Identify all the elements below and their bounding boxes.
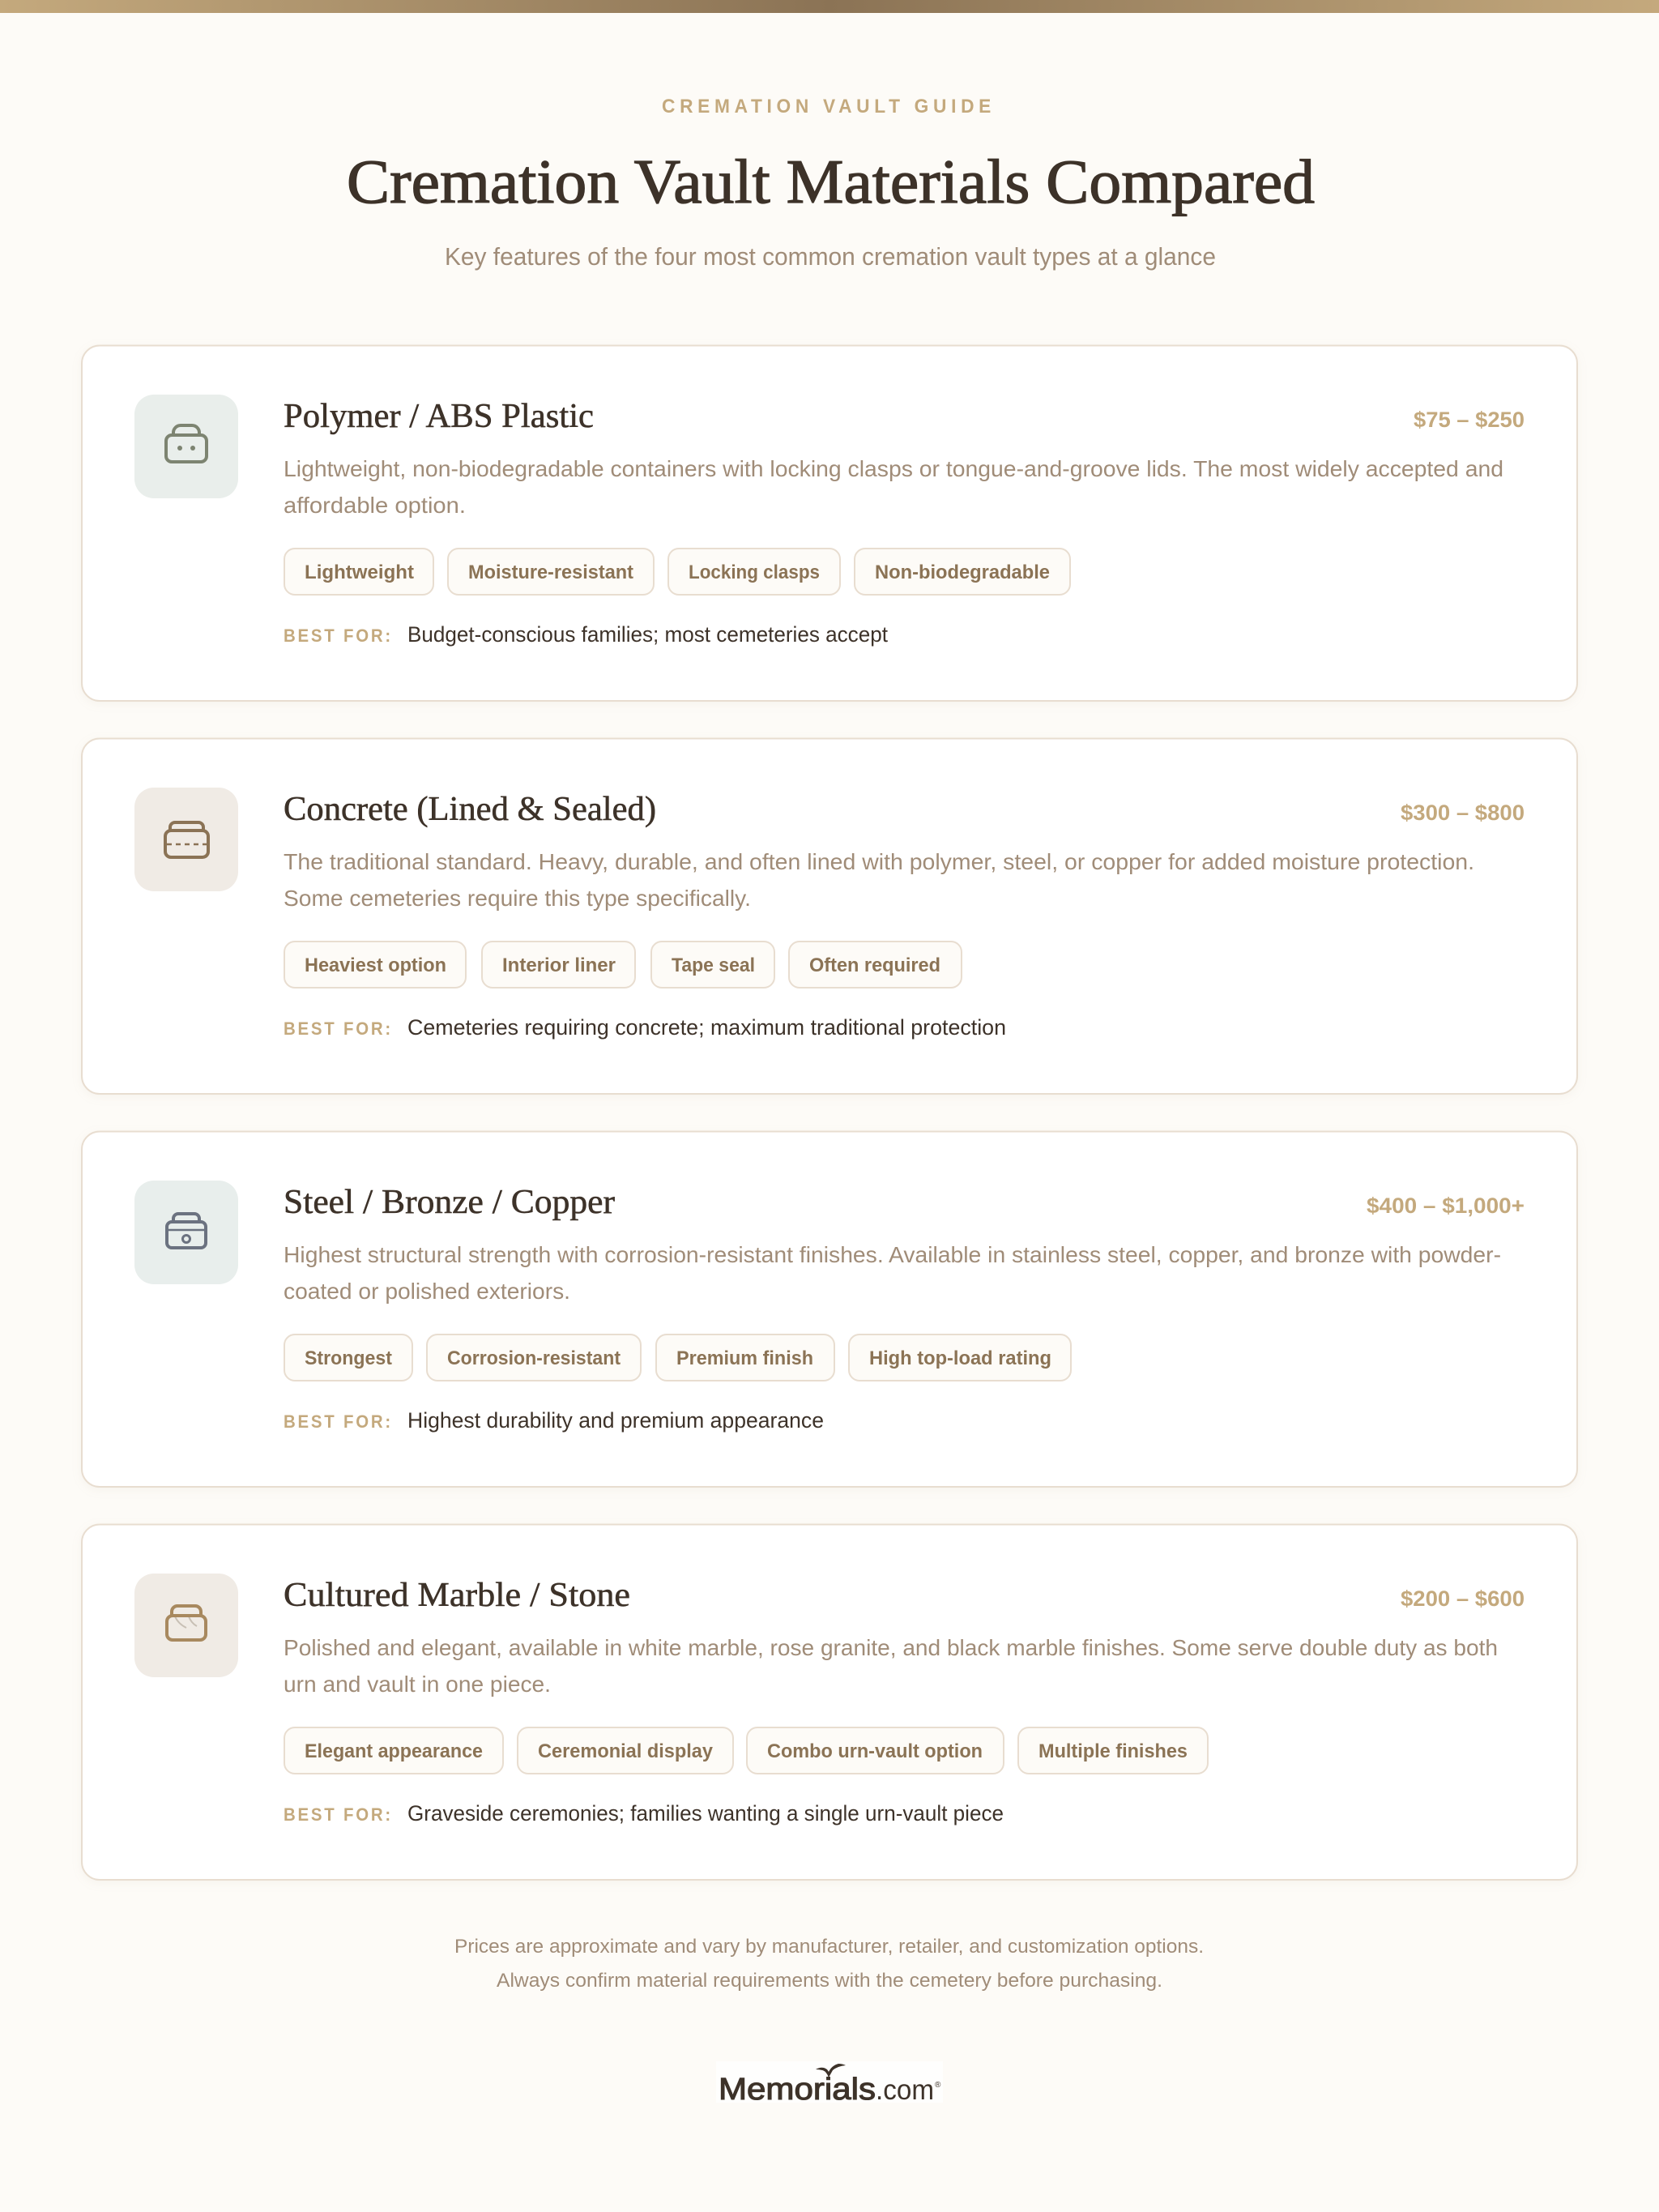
description: Polished and elegant, available in white marble, rose granite, and black marble finishes. Some serve double duty as both: [284, 1635, 1498, 1660]
logo: Memorials.com: ®: [935, 2081, 941, 2090]
feature tags: [284, 549, 1070, 595]
best for: BEST FOR:: [284, 1411, 393, 1432]
feature tags: Non-biodegradable: [875, 562, 1050, 583]
price: $400 – $1,000+: [1367, 1194, 1525, 1218]
feature tags: Multiple finishes: [1038, 1740, 1188, 1762]
best for: BEST FOR:: [284, 626, 393, 646]
eyebrow heading: CREMATION VAULT GUIDE: [662, 96, 996, 117]
card title: Cultured Marble / Stone: [284, 1577, 630, 1614]
logo: Memorials.com: [716, 2061, 943, 2107]
description: [284, 1635, 1498, 1697]
best for: Cemeteries requiring concrete; maximum traditional protection: [407, 1015, 1006, 1040]
feature tags: Premium finish: [676, 1347, 813, 1369]
icon: marble vault: [134, 1574, 238, 1677]
feature tags: [284, 1727, 1208, 1774]
title: Cremation Vault Materials Compared: [347, 147, 1315, 216]
feature tags: Moisture-resistant: [468, 562, 633, 583]
feature tags: Ceremonial display: [538, 1740, 713, 1762]
footer note: Always confirm material requirements with the cemetery before purchasing.: [497, 1970, 1162, 1992]
feature tags: [284, 1334, 1071, 1381]
footer note: [454, 1936, 1204, 1992]
description: [284, 1242, 1501, 1304]
best for: BEST FOR:: [284, 1018, 393, 1039]
description: Some cemeteries require this type specifically.: [284, 886, 751, 911]
best for: Budget-conscious families; most cemeteries accept: [407, 622, 889, 647]
feature tags: Tape seal: [672, 954, 755, 976]
footer note: Prices are approximate and vary by manufacturer, retailer, and customization options.: [454, 1936, 1204, 1958]
description: coated or polished exteriors.: [284, 1279, 570, 1304]
description: affordable option.: [284, 493, 466, 518]
icon: polymer container: [134, 395, 238, 498]
subtitle: Key features of the four most common cremation vault types at a glance: [445, 242, 1216, 271]
panel: polymer / ABS plastic: [82, 345, 1577, 701]
logo: Memorials.com: Memorials: [719, 2073, 876, 2107]
description: The traditional standard. Heavy, durable, and often lined with polymer, steel, or copper for added moisture protection.: [284, 849, 1474, 874]
feature tags: Strongest: [305, 1347, 392, 1369]
feature tags: Locking clasps: [689, 562, 820, 583]
price: $200 – $600: [1401, 1586, 1525, 1611]
card title: Polymer / ABS Plastic: [284, 398, 594, 435]
panel: concrete: [82, 739, 1577, 1094]
top gradient bar: [0, 0, 1659, 13]
description: urn and vault in one piece.: [284, 1672, 551, 1697]
icon: concrete vault: [134, 788, 238, 891]
feature tags: Lightweight: [305, 562, 414, 583]
description: [284, 456, 1503, 518]
feature tags: High top-load rating: [869, 1347, 1051, 1369]
feature tags: Interior liner: [502, 954, 616, 976]
feature tags: Often required: [809, 954, 940, 976]
best for: Highest durability and premium appearance: [407, 1408, 824, 1433]
description: [284, 849, 1474, 911]
feature tags: Elegant appearance: [305, 1740, 483, 1762]
feature tags: Heaviest option: [305, 954, 446, 976]
best for: Graveside ceremonies; families wanting a single urn-vault piece: [407, 1801, 1004, 1826]
feature tags: Combo urn-vault option: [767, 1740, 983, 1762]
feature tags: [284, 942, 962, 988]
feature tags: Corrosion-resistant: [447, 1347, 621, 1369]
icon: metal vault: [134, 1181, 238, 1284]
panel: steel / bronze / copper: [82, 1131, 1577, 1487]
best for: BEST FOR:: [284, 1804, 393, 1825]
panel: cultured marble / stone: [82, 1525, 1577, 1880]
price: $75 – $250: [1414, 408, 1525, 432]
icon: bird: [816, 2064, 846, 2077]
card title: Concrete (Lined & Sealed): [284, 791, 656, 828]
card title: Steel / Bronze / Copper: [284, 1184, 615, 1221]
description: Lightweight, non-biodegradable containers with locking clasps or tongue-and-groove lids. The most widely accepted and: [284, 456, 1503, 481]
logo: Memorials.com: .com: [876, 2074, 934, 2106]
price: $300 – $800: [1401, 801, 1525, 825]
description: Highest structural strength with corrosion-resistant finishes. Available in stainless steel, copper, and bronze with powder-: [284, 1242, 1501, 1267]
